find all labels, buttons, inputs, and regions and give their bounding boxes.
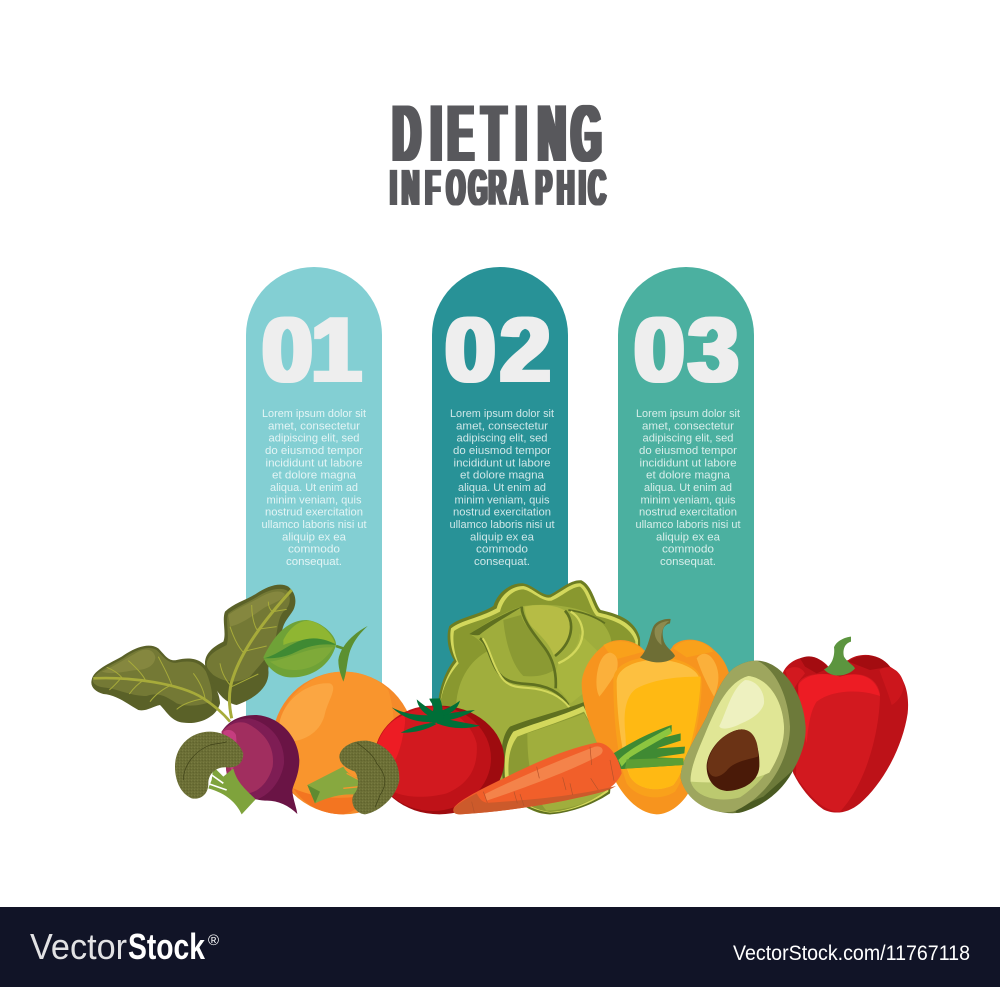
icon: beet — [222, 715, 299, 814]
panel: step 01 — [246, 267, 382, 730]
text block 02: et dolore magna — [460, 470, 545, 482]
text block 03: amet, consectetur — [642, 420, 734, 432]
icon: vegetables on the right — [437, 580, 908, 814]
text block 02: do eiusmod tempor — [453, 445, 551, 457]
pepper stem — [640, 619, 675, 662]
text block 01: adipiscing elit, sed — [268, 433, 360, 445]
icon: upper leaf — [205, 585, 295, 718]
icon: broccoli right — [307, 741, 399, 814]
text block 01: incididunt ut labore — [266, 457, 362, 469]
text block 02 — [450, 408, 554, 568]
icon: broccoli left — [175, 732, 256, 814]
text block 01: ullamco laboris nisi ut — [262, 519, 366, 531]
footer logo bold: Stock — [128, 926, 206, 967]
text block 03: commodo — [662, 544, 714, 556]
text block 02: ullamco laboris nisi ut — [450, 519, 554, 531]
text block 01: Lorem ipsum dolor sit — [262, 408, 366, 420]
text block 01: consequat. — [286, 556, 342, 568]
text block 03: nostrud exercitation — [639, 507, 737, 519]
icon: left leaf — [91, 646, 230, 723]
avocado pit — [707, 729, 759, 791]
text block 01: commodo — [288, 544, 340, 556]
text block 03: aliqua. Ut enim ad — [644, 482, 732, 494]
footer bar — [0, 907, 1000, 987]
text block 02: nostrud exercitation — [453, 507, 551, 519]
title line 1: DIETING — [393, 89, 601, 179]
panel: step 03 — [618, 267, 754, 730]
title line 2: INFOGRAPHIC — [390, 160, 606, 217]
icon: yellow pepper — [582, 619, 732, 814]
text block 03: incididunt ut labore — [640, 457, 736, 469]
icon: lime — [263, 620, 346, 677]
icon: carrot — [453, 725, 685, 814]
text block 01: nostrud exercitation — [265, 507, 363, 519]
number 02: 02 — [445, 300, 551, 401]
text block 02: amet, consectetur — [456, 420, 548, 432]
footer url: VectorStock.com/11767118 — [733, 942, 970, 965]
text block 01: do eiusmod tempor — [265, 445, 363, 457]
footer logo: Vector — [30, 926, 127, 967]
icon: vegetables on the left — [91, 585, 504, 814]
icon: tomato — [374, 698, 504, 814]
footer registered mark: ® — [208, 932, 219, 949]
icon: cabbage — [437, 580, 640, 814]
red pepper stem — [824, 637, 855, 676]
number 01: 01 — [262, 300, 362, 401]
cabbage inner head — [469, 605, 612, 707]
text block 02: adipiscing elit, sed — [456, 433, 548, 445]
text block 03: et dolore magna — [646, 470, 731, 482]
text block 03: do eiusmod tempor — [639, 445, 737, 457]
text block 03: minim veniam, quis — [640, 494, 736, 506]
text block 02: minim veniam, quis — [454, 494, 550, 506]
text block 02: commodo — [476, 544, 528, 556]
text block 01: aliqua. Ut enim ad — [270, 482, 358, 494]
text block 03 — [636, 408, 740, 568]
orange leaf — [338, 626, 368, 682]
text block 01: minim veniam, quis — [266, 494, 362, 506]
text block 01: aliquip ex ea — [282, 531, 347, 543]
text block 02: incididunt ut labore — [454, 457, 550, 469]
text block 03: adipiscing elit, sed — [642, 433, 734, 445]
text block 03: Lorem ipsum dolor sit — [636, 408, 740, 420]
tomato calyx — [392, 698, 480, 733]
icon: avocado — [681, 661, 806, 813]
number 03: 03 — [634, 300, 739, 401]
text block 03: consequat. — [660, 556, 716, 568]
text block 01 — [262, 408, 366, 568]
text block 02: aliqua. Ut enim ad — [458, 482, 546, 494]
text block 02: Lorem ipsum dolor sit — [450, 408, 554, 420]
text block 03: aliquip ex ea — [656, 531, 721, 543]
text block 02: consequat. — [474, 556, 530, 568]
text block 02: aliquip ex ea — [470, 531, 535, 543]
icon: orange — [272, 626, 415, 814]
text block 03: ullamco laboris nisi ut — [636, 519, 740, 531]
panel: step 02 — [432, 267, 568, 730]
text block 01: amet, consectetur — [268, 420, 360, 432]
text block 01: et dolore magna — [272, 470, 357, 482]
icon: red pepper — [773, 637, 908, 813]
cabbage lower leaf — [501, 702, 613, 814]
title — [390, 89, 606, 217]
